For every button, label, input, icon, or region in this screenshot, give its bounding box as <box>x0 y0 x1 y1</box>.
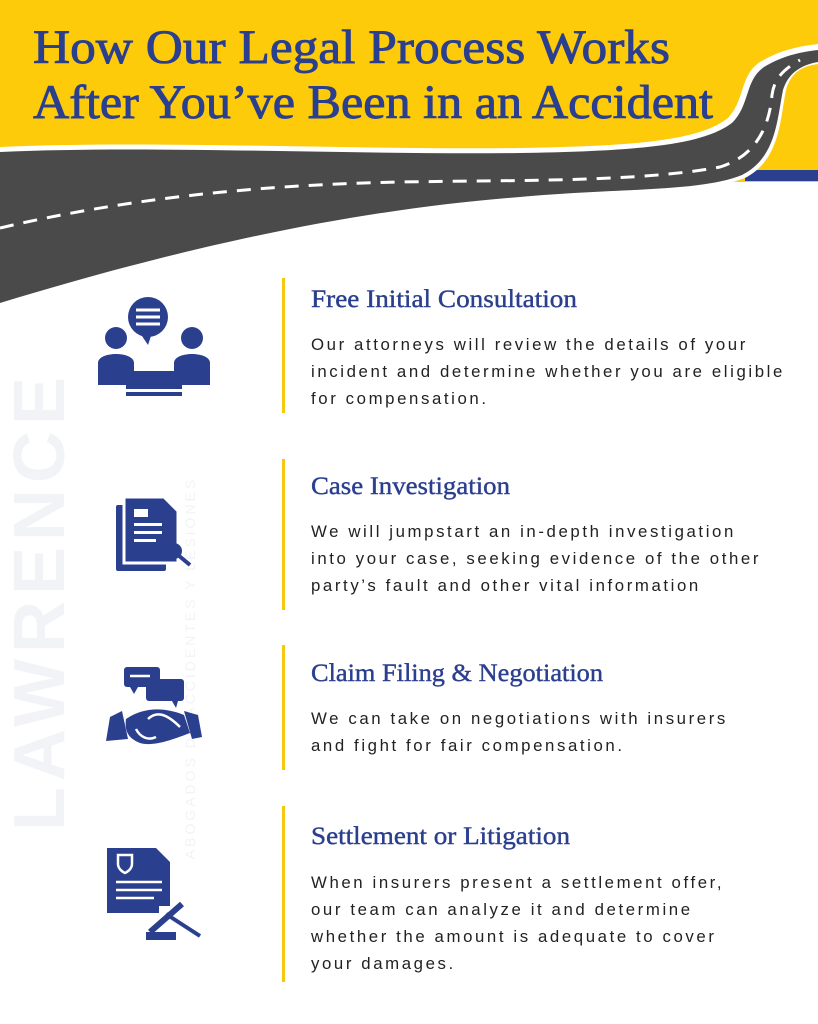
text 1: incident and determine whether you are eligible <box>311 362 785 381</box>
step 3 <box>282 645 728 770</box>
step 1 <box>282 278 785 413</box>
icon: settlement <box>107 848 201 940</box>
text 2 <box>311 522 761 595</box>
heading 1: Free Initial Consultation <box>311 286 578 313</box>
title <box>33 21 714 129</box>
icon: handshake <box>106 667 202 744</box>
text 3: and fight for fair compensation. <box>311 736 625 755</box>
text 2: We will jumpstart an in-depth investigation <box>311 522 736 541</box>
title: How Our Legal Process Works <box>33 21 670 74</box>
watermark: LAWRENCE <box>0 371 80 831</box>
text 1 <box>311 335 785 408</box>
heading 3: Claim Filing & Negotiation <box>311 660 604 687</box>
step 4 <box>282 806 724 982</box>
text 2: party’s fault and other vital information <box>311 576 701 595</box>
text 4 <box>311 873 724 973</box>
text 4: our team can analyze it and determine <box>311 900 693 919</box>
text 1: Our attorneys will review the details of your <box>311 335 748 354</box>
text 3 <box>311 709 728 755</box>
text 4: whether the amount is adequate to cover <box>311 927 717 946</box>
text 3: We can take on negotiations with insurers <box>311 709 728 728</box>
header with road <box>0 0 818 303</box>
step 2 <box>282 459 761 610</box>
icon: investigation <box>116 498 192 571</box>
text 1: for compensation. <box>311 389 489 408</box>
icon: consultation <box>98 297 210 396</box>
title: After You’ve Been in an Accident <box>33 76 714 129</box>
text 4: your damages. <box>311 954 456 973</box>
heading 2: Case Investigation <box>311 473 511 500</box>
heading 4: Settlement or Litigation <box>311 823 571 850</box>
watermark: ABOGADOS DE ACCIDENTES Y LESIONES <box>182 477 198 859</box>
text 2: into your case, seeking evidence of the other <box>311 549 761 568</box>
text 4: When insurers present a settlement offer, <box>311 873 724 892</box>
watermark <box>0 371 198 859</box>
